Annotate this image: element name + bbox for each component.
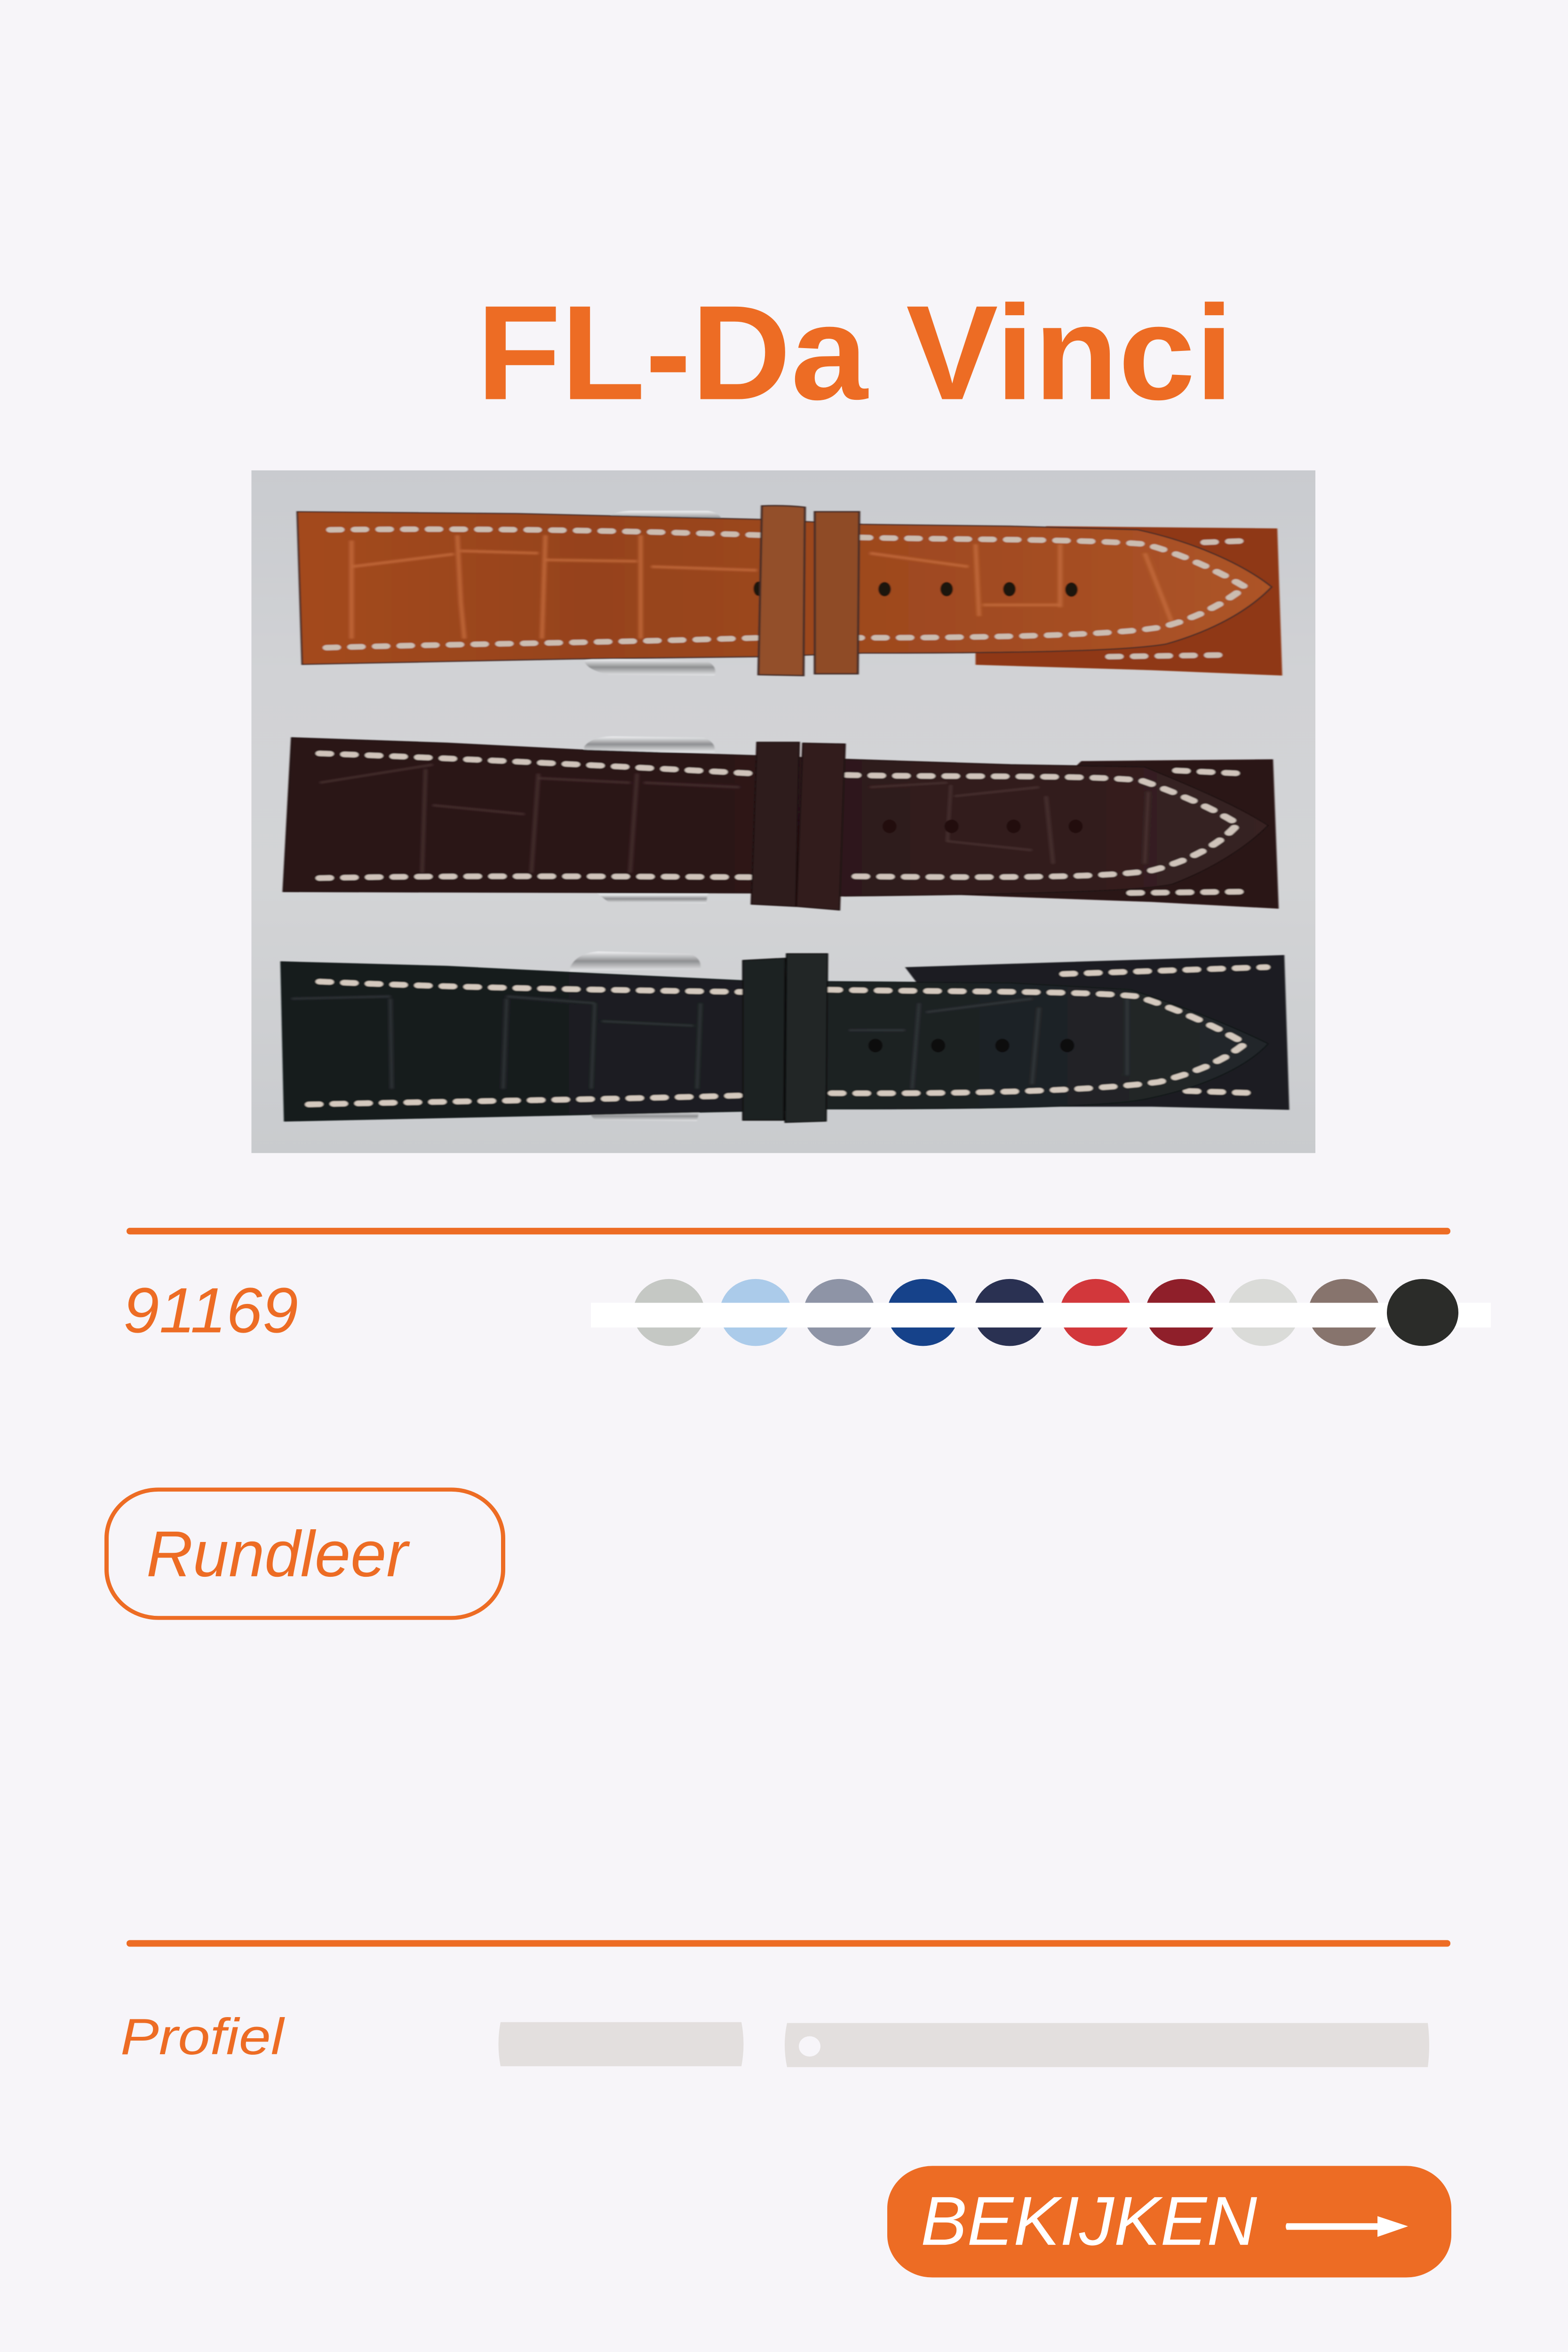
profile shape: long segment with hole [785, 2023, 1429, 2067]
button: BEKIJKEN [887, 2166, 1451, 2278]
profile shape: short segment [499, 2022, 743, 2066]
button: BEKIJKEN: BEKIJKEN [921, 2183, 1257, 2260]
photo background [251, 470, 1315, 1153]
photo: three leather watch straps [251, 470, 1315, 1153]
colour swatches [591, 1279, 1491, 1346]
article number: 91169 [123, 1275, 298, 1346]
icon: arrow [1286, 2216, 1408, 2237]
material tag: Rundleer [106, 1490, 503, 1618]
strap: dark brown [283, 736, 1279, 910]
material tag: Rundleer: Rundleer [146, 1518, 410, 1590]
label: Profiel: Profiel [120, 2008, 285, 2065]
divider: upper orange rule [127, 1228, 1450, 1234]
divider: lower orange rule [127, 1940, 1450, 1947]
strap: cognac brown [297, 506, 1282, 675]
strap: black [281, 952, 1289, 1122]
title: FL-Da Vinci [477, 277, 1234, 428]
